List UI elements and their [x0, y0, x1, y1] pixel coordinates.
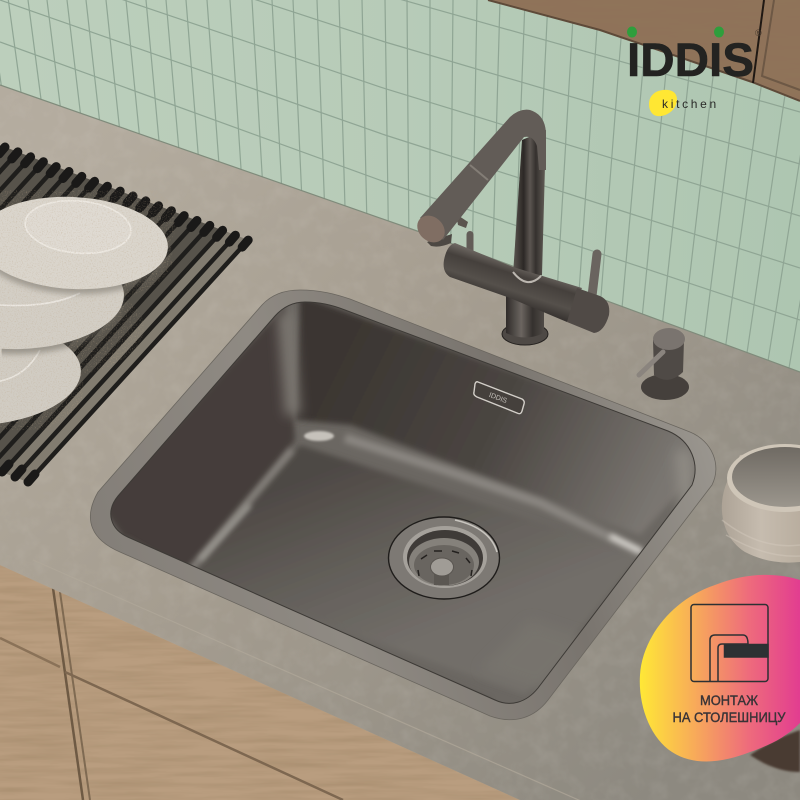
badge label — [672, 693, 786, 725]
sink bowl shading — [111, 302, 694, 703]
sink — [90, 290, 720, 720]
plate shadow: middle on bottom — [0, 248, 126, 358]
lower wood cabinet fronts — [0, 560, 530, 800]
badge blob — [640, 575, 800, 761]
vertical pipe — [513, 130, 546, 275]
plate: bottom — [0, 320, 83, 430]
drain — [388, 517, 500, 599]
sink rim — [90, 290, 716, 720]
collar at pipe base — [513, 272, 541, 282]
mixer end cap — [567, 288, 609, 333]
logo wordmark: IDDIS — [627, 34, 754, 87]
plate: middle — [0, 243, 126, 353]
left lever — [466, 231, 474, 255]
icon: countertop mounting — [691, 604, 768, 682]
spray head underside — [427, 234, 452, 247]
stacked plates — [0, 190, 175, 430]
sink inner edge — [111, 302, 695, 703]
overflow label plate — [474, 382, 524, 414]
logo kitchen word: kitchen — [662, 97, 719, 111]
overflow label plate: IDDIS — [488, 392, 508, 405]
spout end cap — [412, 210, 450, 248]
logo green dots — [627, 26, 724, 38]
upper wood cabinet — [480, 0, 800, 110]
right lever — [592, 254, 597, 296]
badge label: НА СТОЛЕШНИЦУ — [672, 710, 786, 725]
badge: mount on countertop — [640, 575, 800, 761]
swivel spout — [420, 110, 546, 240]
plate: top — [0, 192, 170, 294]
registered mark: ® — [755, 28, 762, 38]
badge label: МОНТАЖ — [700, 693, 759, 708]
mixer body — [444, 243, 582, 322]
faucet base — [502, 296, 548, 345]
tile backsplash — [0, 0, 800, 380]
spout attachment — [456, 214, 468, 228]
plate speckles — [0, 190, 175, 430]
logo yellow blob — [649, 90, 677, 116]
drain stopper — [430, 558, 454, 585]
plate shadow: top on middle — [0, 197, 170, 299]
soap dispenser — [639, 328, 689, 400]
dark object behind badge — [750, 730, 800, 772]
ceramic cup — [722, 444, 800, 563]
drying rack — [0, 147, 248, 482]
logo: IDDIS kitchen — [627, 26, 762, 116]
faucet — [412, 110, 609, 345]
